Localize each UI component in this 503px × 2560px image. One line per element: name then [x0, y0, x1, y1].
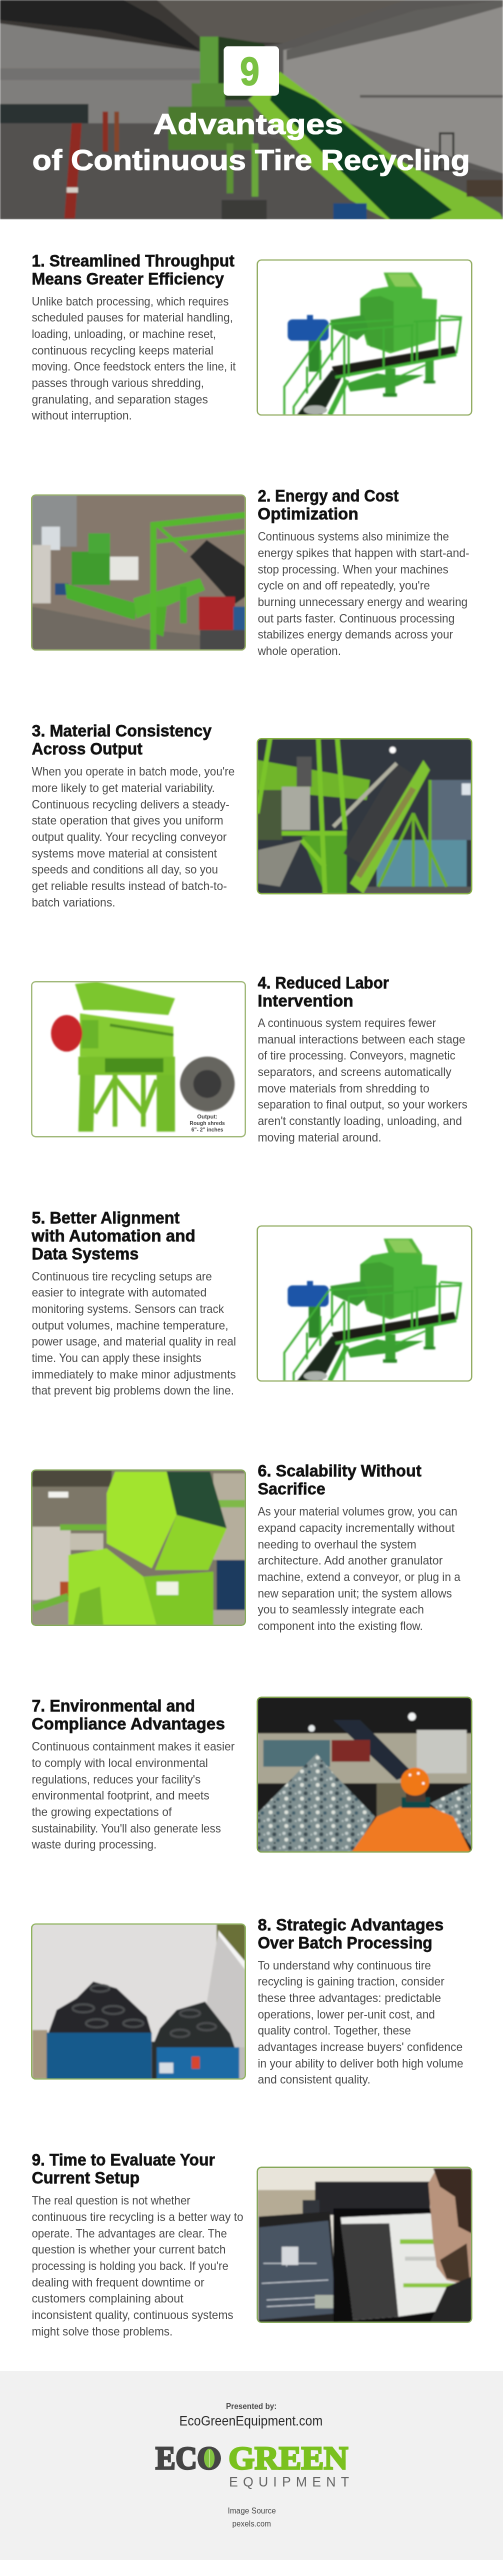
body text 1 [31, 294, 236, 423]
body text 4: A continuous system requires fewer [258, 1016, 436, 1030]
image source credit: pexels.com [232, 2520, 271, 2529]
body text 8: recycling is gaining traction, consider [258, 1975, 444, 1989]
body text 8: operations, lower per-unit cost, and [258, 2007, 435, 2021]
body text 9: processing is holding you back. If you're [32, 2259, 229, 2273]
body text 2 [257, 530, 469, 658]
heading 6: Sacrifice [258, 1481, 325, 1499]
image: tire shredder with output inset [32, 982, 245, 1137]
body text 9: customers complaining about [32, 2292, 184, 2306]
body text 1: passes through various shredding, [32, 376, 204, 390]
body text 3: speeds and conditions all day, so you [32, 863, 218, 877]
body text 2: stop processing. When your machines [258, 562, 448, 576]
body text 8: in your ability to deliver both high volume [258, 2056, 464, 2070]
panel: 8 strategic advantages [32, 1917, 464, 2087]
image source credit: Image Source [228, 2507, 277, 2516]
inset label: output: 6"- 2" inches [191, 1127, 223, 1133]
body text 4: move materials from shredding to [258, 1081, 430, 1095]
body text 7: to comply with local environmental [32, 1756, 208, 1770]
body text 1: granulating, and separation stages [32, 392, 208, 406]
body text 9: The real question is not whether [32, 2194, 190, 2208]
body text 9: might solve those problems. [32, 2324, 173, 2338]
heading 3: Across Output [32, 741, 143, 759]
body text 3: systems move material at consistent [32, 846, 218, 860]
body text 5 [32, 1269, 236, 1398]
body text 5: easier to integrate with automated [32, 1286, 207, 1300]
body text 1: without interruption. [31, 409, 132, 423]
body text 7: sustainability. You'll also generate less [32, 1821, 221, 1835]
body text 7: regulations, reduces your facility's [32, 1772, 201, 1786]
heading 2 [258, 488, 399, 524]
heading 6 [258, 1463, 422, 1499]
body text 5: output volumes, machine temperature, [32, 1318, 228, 1332]
body text 1: scheduled pauses for material handling, [32, 311, 233, 325]
body text 2: stabilizes energy demands across your [258, 628, 453, 642]
body text 2: Continuous systems also minimize the [258, 530, 449, 544]
heading 9: 9. Time to Evaluate Your [32, 2152, 216, 2170]
title [32, 109, 470, 177]
heading 5: Data Systems [32, 1246, 139, 1264]
heading 7: 7. Environmental and [32, 1698, 195, 1716]
heading 1 [32, 253, 235, 289]
body text 9 [32, 2194, 244, 2338]
heading 8: 8. Strategic Advantages [258, 1917, 444, 1935]
inset label: output [190, 1115, 225, 1133]
badge with number 9: 9 [240, 50, 260, 94]
body text 5: monitoring systems. Sensors can track [32, 1302, 225, 1316]
body text 3 [32, 765, 235, 909]
panel: 4 reduced labor [32, 974, 467, 1144]
heading 1: Means Greater Efficiency [32, 271, 225, 289]
heading 2: 2. Energy and Cost [258, 488, 399, 506]
body text 7 [31, 1740, 235, 1852]
body text 5: time. You can apply these insights [32, 1351, 201, 1365]
body text 6: you to seamlessly integrate each [258, 1603, 424, 1617]
image: bright green granulator [32, 1470, 245, 1625]
body text 9: dealing with frequent downtime or [32, 2275, 204, 2289]
body text 7: waste during processing. [31, 1838, 157, 1852]
body text 8: advantages increase buyers' confidence [258, 2040, 463, 2054]
body text 8: quality control. Together, these [258, 2024, 411, 2038]
body text 4 [258, 1016, 467, 1144]
body text 5: immediately to make minor adjustments [32, 1367, 236, 1381]
heading 5 [31, 1209, 195, 1264]
body text 2: whole operation. [257, 644, 341, 658]
body text 6: new separation unit; the system allows [258, 1586, 452, 1600]
panel: 5 automation and data [31, 1209, 472, 1398]
body text 6 [258, 1505, 461, 1633]
badge with number 9 [224, 46, 279, 96]
body text 5: that prevent big problems down the line. [32, 1384, 234, 1398]
panel: 9 evaluate setup [32, 2152, 472, 2338]
panel: 2 energy and cost [32, 488, 469, 658]
heading 1: 1. Streamlined Throughput [32, 253, 235, 271]
title: Advantages [153, 109, 343, 141]
heading 9 [32, 2152, 216, 2188]
body text 4: separators, and screens automatically [258, 1065, 451, 1079]
heading 3 [32, 723, 213, 759]
panel: 1 streamlined throughput [31, 253, 472, 423]
body text 7: environmental footprint, and meets [32, 1789, 209, 1803]
image: compactor in brick room [32, 495, 245, 650]
body text 1: loading, unloading, or machine reset, [32, 327, 216, 341]
heading 5: 5. Better Alignment [32, 1209, 180, 1227]
body text 1: moving. Once feedstock enters the line, it [32, 360, 236, 374]
body text 6: architecture. Add another granulator [258, 1554, 443, 1568]
body text 3: batch variations. [32, 895, 115, 909]
title: of Continuous Tire Recycling [32, 145, 470, 177]
body text 9: inconsistent quality, continuous systems [32, 2308, 233, 2322]
body text 6: expand capacity incrementally without [258, 1521, 455, 1535]
body text 2: cycle on and off repeatedly, you're [258, 579, 430, 593]
body text 3: Continuous recycling delivers a steady- [32, 797, 229, 811]
heading 9: Current Setup [32, 2170, 140, 2188]
image: conveyor line in plant [257, 739, 472, 894]
body text 2: burning unnecessary energy and wearing [258, 595, 468, 609]
presented by: Presented by: [226, 2402, 277, 2411]
footer [0, 2371, 503, 2560]
hero photo: conveyor in warehouse [0, 0, 503, 219]
image: worker in front of shredded pile [257, 1697, 472, 1852]
body text 2: energy spikes that happen with start-and- [258, 546, 469, 560]
body text 4: of tire processing. Conveyors, magnetic [258, 1049, 455, 1063]
image: man at computer monitors [257, 2167, 472, 2322]
body text 4: separation to final output, so your workers [258, 1098, 467, 1112]
logo: Eco Green Equipment: ECO [156, 2441, 220, 2477]
inset label: output: Output: [197, 1115, 218, 1121]
body text 8 [258, 1958, 464, 2087]
body text 4: moving material around. [258, 1130, 381, 1144]
heading 8 [258, 1917, 444, 1953]
heading 5: with Automation and [31, 1227, 195, 1245]
heading 7: Compliance Advantages [32, 1716, 225, 1734]
body text 5: Continuous tire recycling setups are [32, 1269, 212, 1283]
body text 7: Continuous containment makes it easier [32, 1740, 235, 1754]
body text 4: manual interactions between each stage [258, 1032, 466, 1046]
body text 6: As your material volumes grow, you can [258, 1505, 457, 1519]
body text 8: To understand why continuous tire [258, 1958, 431, 1972]
body text 3: output quality. Your recycling conveyor [32, 830, 227, 844]
heading 4: 4. Reduced Labor [258, 974, 390, 992]
heading 4: Intervention [258, 992, 353, 1010]
panel: 7 environmental [31, 1697, 472, 1852]
logo: Eco Green Equipment [156, 2441, 349, 2490]
icon: leaf in O [198, 2447, 221, 2470]
body text 8: and consistent quality. [258, 2073, 370, 2087]
heading 7 [32, 1698, 225, 1734]
image: green shredder with platform [257, 260, 472, 415]
body text 2: out parts faster. Continuous processing [258, 611, 455, 625]
inset label: output: Rough shreds [190, 1121, 225, 1127]
hero banner [0, 0, 503, 219]
body text 8: these three advantages: predictable [258, 1991, 441, 2005]
panel: 3 material consistency [32, 723, 472, 909]
body text 3: When you operate in batch mode, you're [32, 765, 235, 779]
image: green shredder with platform [257, 1226, 472, 1381]
image source credit [228, 2507, 277, 2529]
logo: Eco Green Equipment: GREEN [228, 2441, 348, 2477]
heading 8: Over Batch Processing [258, 1935, 432, 1953]
heading 2: Optimization [258, 506, 358, 524]
body text 1: Unlike batch processing, which requires [32, 294, 229, 308]
body text 7: the growing expectations of [32, 1805, 172, 1819]
heading 6: 6. Scalability Without [258, 1463, 422, 1481]
heading 4 [258, 974, 390, 1010]
body text 6: needing to overhaul the system [258, 1537, 416, 1551]
body text 9: question is whether your current batch [32, 2243, 226, 2257]
body text 1: continuous recycling keeps material [32, 343, 213, 357]
panel: 6 scalability [32, 1463, 461, 1633]
body text 3: state operation that gives you uniform [32, 814, 223, 828]
body text 9: continuous tire recycling is a better way to [32, 2210, 244, 2224]
body text 9: operate. The advantages are clear. The [32, 2226, 227, 2240]
body text 3: get reliable results instead of batch-to- [32, 879, 227, 893]
image: tires in blue dumpsters [32, 1924, 245, 2079]
body text 4: aren't constantly loading, unloading, and [258, 1114, 462, 1128]
body text 6: machine, extend a conveyor, or plug in a [258, 1570, 461, 1584]
body text 6: component into the existing flow. [258, 1619, 423, 1633]
body text 3: more likely to get material variability. [32, 781, 215, 795]
website: EcoGreenEquipment.com [179, 2414, 323, 2428]
heading 3: 3. Material Consistency [32, 723, 213, 741]
logo: Eco Green Equipment: EQUIPMENT [229, 2475, 349, 2490]
body text 5: power usage, and material quality in real [32, 1335, 236, 1349]
